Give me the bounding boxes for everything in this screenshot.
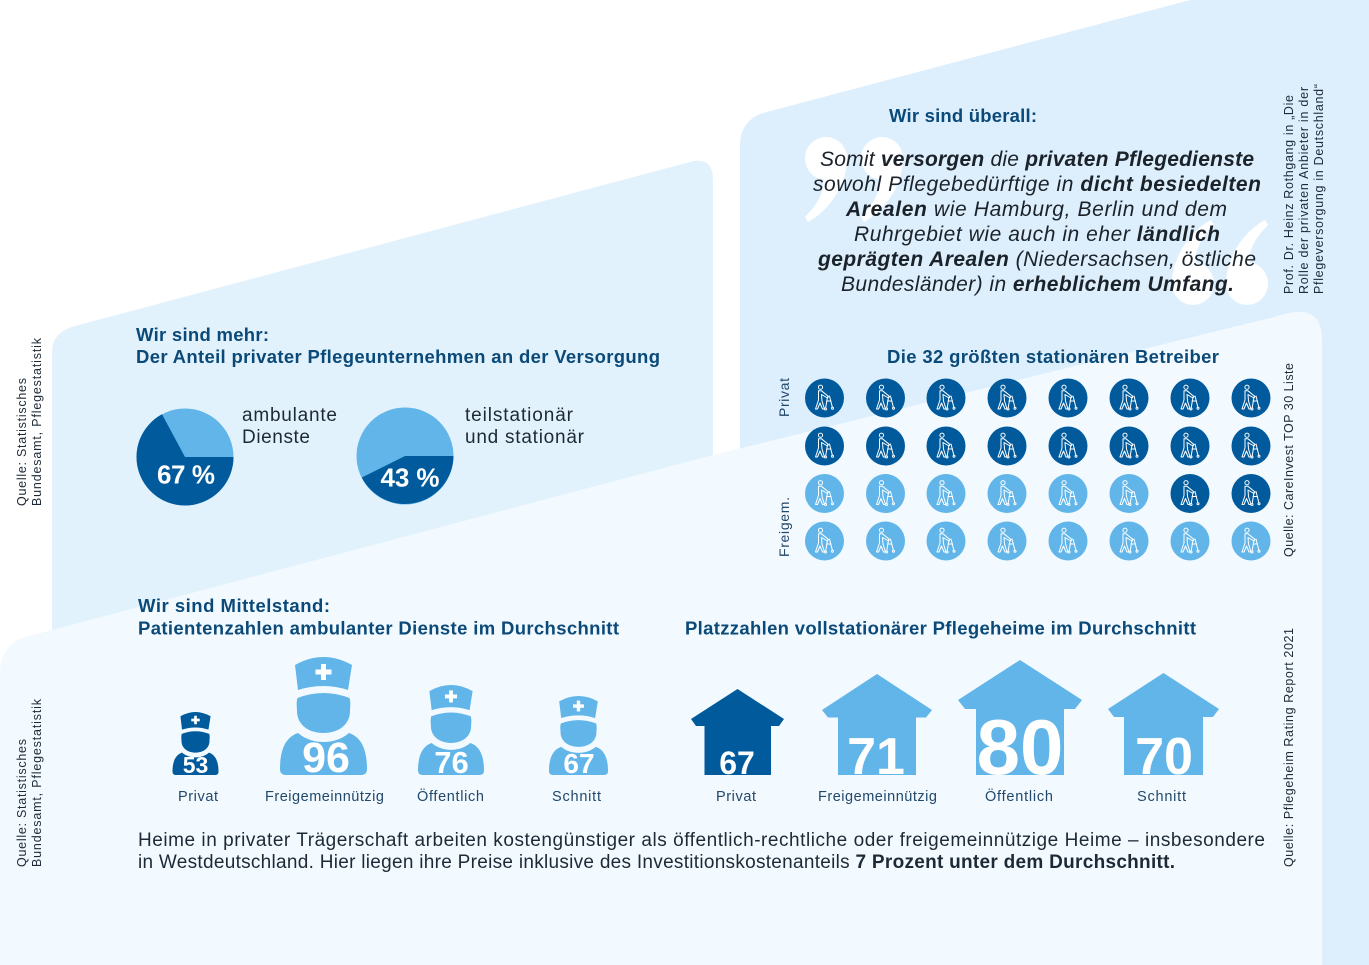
icon: house Privat 67: Privat [716, 789, 756, 805]
pie chart: ambulante Dienste 67 % [136, 408, 234, 506]
icon: nurse Schnitt 67: Schnitt [552, 789, 601, 805]
label: Privat row: Privat [776, 378, 792, 417]
icon: closing quote mark [1172, 220, 1268, 305]
label: teilstationär und stationär: teilstationär [465, 405, 574, 426]
heading: Wir sind überall: Wir sind überall: [889, 105, 1037, 126]
source: left top [15, 337, 44, 506]
quote text: Ruhrgebiet wie auch in eher ländlich [854, 223, 1220, 246]
icon: house Öffentlich 80: Öffentlich [985, 787, 1053, 805]
source: left top: Quelle: Statistisches [15, 378, 29, 506]
icon: nurse Privat 53: 53 [183, 752, 208, 778]
icon: house Schnitt 70: Schnitt [1137, 789, 1186, 805]
icon: nurse Freigemeinnützig 96: Freigemeinnützig [265, 789, 384, 805]
label: ambulante Dienste: Dienste [242, 427, 310, 448]
icon: nurse Öffentlich 76: 76 [434, 745, 469, 780]
heading: Wir sind mehr: Wir sind mehr: [136, 324, 269, 345]
icon: house Öffentlich 80: 80 [977, 703, 1063, 791]
source: quote attribution: Rolle der privaten Anbieter in der [1297, 87, 1311, 294]
text block: conclusion: in Westdeutschland. Hier liegen ihre Preise inklusive des Investitionskostenanteils 7 Prozent unter dem Durchschnitt. [138, 852, 1175, 873]
icon: house Freigemeinnützig 71: Freigemeinnützig [818, 789, 937, 805]
heading: Wir sind Mittelstand: Wir sind Mittelstand: [138, 595, 330, 616]
heading: Platzzahlen: Platzzahlen vollstationärer Pflegeheime im Durchschnitt [685, 618, 1196, 638]
quote text: Bundesländer) in erheblichem Umfang. [841, 273, 1234, 296]
icon: house Privat 67: 67 [719, 745, 755, 781]
label: ambulante Dienste: ambulante [242, 405, 337, 426]
source: left top: Bundesamt, Pflegestatistik [30, 337, 44, 506]
label: teilstationär und stationär: und stationär [465, 427, 585, 448]
source: quote attribution: Pflegeversorgung in Deutschland“ [1312, 84, 1326, 294]
panel: left background [52, 161, 713, 700]
row 2 [805, 426, 1270, 466]
quote text [813, 148, 1261, 296]
icon: nurse Freigemeinnützig 96 [265, 657, 384, 805]
quote text: geprägten Arealen (Niedersachsen, östliche [817, 248, 1256, 271]
source: left bottom [15, 698, 44, 867]
row 3 [805, 474, 1270, 513]
label: Freigem row: Freigem. [776, 497, 792, 557]
icon: nurse Privat 53: Privat [178, 789, 218, 805]
panel: right background [740, 0, 1369, 965]
heading: Wir sind Mittelstand [138, 595, 619, 638]
source: left bottom: Bundesamt, Pflegestatistik [30, 698, 44, 867]
icon: nurse Öffentlich 76: Öffentlich [417, 787, 484, 805]
icon: nurse Schnitt 67 [549, 696, 608, 805]
quote text: sowohl Pflegebedürftige in dicht besiedelten [813, 173, 1261, 196]
row 1 [805, 378, 1270, 418]
source: Pflegeheim Rating Report: Quelle: Pflegeheim Rating Report 2021 [1282, 628, 1296, 867]
row 4 [805, 522, 1270, 560]
icon: nurse Freigemeinnützig 96: 96 [302, 734, 350, 782]
icon: house Freigemeinnützig 71 [818, 674, 937, 805]
source: left bottom: Quelle: Statistisches [15, 739, 29, 867]
pie chart: teilstationär und stationär 43 % [356, 408, 454, 504]
icon: nurse Schnitt 67: 67 [563, 748, 595, 779]
icon: opening quote mark [805, 137, 903, 222]
heading: Wir sind Mittelstand: Patientenzahlen ambulanter Dienste im Durchschnitt [138, 618, 619, 638]
quote text: Somit versorgen die privaten Pflegedienste [820, 148, 1254, 171]
icon: nurse Öffentlich 76 [417, 685, 484, 805]
label: teilstationär und stationär [465, 405, 585, 448]
panel: front background [0, 312, 1322, 965]
text block: conclusion [138, 830, 1265, 873]
heading: Die 32 größten: Die 32 größten stationären Betreiber [887, 346, 1219, 367]
source: CareInvest: Quelle: CareInvest TOP 30 Liste [1282, 363, 1296, 557]
pie chart: teilstationär und stationär 43 %: 43 % [380, 462, 440, 492]
text block: conclusion: Heime in privater Trägerschaft arbeiten kostengünstiger als öffentlich-rechtliche oder freigemeinnützige Heime – insbesondere [138, 830, 1265, 851]
icon: nurse Privat 53 [172, 712, 218, 805]
source: quote attribution [1282, 84, 1326, 294]
icon: house Privat 67 [691, 689, 784, 805]
heading: Wir sind mehr: Der Anteil privater Pflegeunternehmen an der Versorgung [136, 346, 660, 367]
icon: house Schnitt 70: 70 [1135, 728, 1193, 786]
icon: house Schnitt 70 [1108, 673, 1219, 805]
pie chart: ambulante Dienste 67 %: 67 % [157, 460, 215, 490]
icon grid: 32 operators [805, 378, 1270, 560]
quote text: Arealen wie Hamburg, Berlin und dem [845, 198, 1227, 221]
icon: house Öffentlich 80 [958, 660, 1082, 805]
source: quote attribution: Prof. Dr. Heinz Rothgang in „Die [1282, 95, 1296, 294]
heading: Wir sind mehr [136, 324, 660, 367]
label: ambulante Dienste [242, 405, 337, 448]
icon: house Freigemeinnützig 71: 71 [847, 728, 905, 786]
